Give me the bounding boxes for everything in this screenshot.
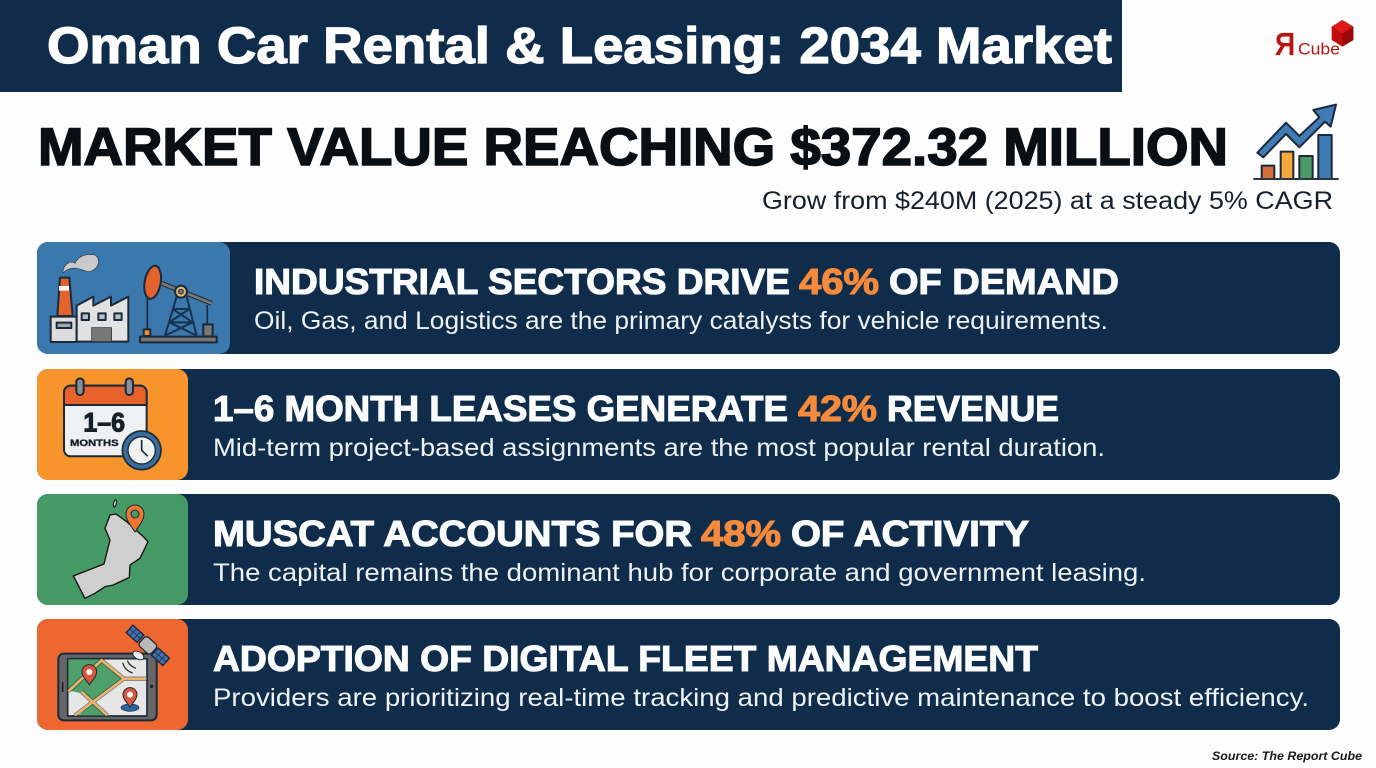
heading: INDUSTRIAL SECTORS DRIVE: [254, 261, 790, 302]
panel: digital fleet management: [37, 619, 1340, 730]
description: Mid-term project-based assignments are the most popular rental duration.: [213, 434, 1105, 462]
icon panel: blue: [37, 242, 230, 354]
heading: 42%: [798, 388, 877, 429]
icon: calendar and clock: [64, 378, 161, 470]
icon panel: red-orange: [37, 619, 188, 730]
description: The capital remains the dominant hub for corporate and government leasing.: [213, 559, 1146, 587]
logo: RCube: [1275, 20, 1353, 62]
header banner: [0, 0, 1122, 92]
icon: growth chart: [1253, 105, 1339, 179]
icon: factory and oil pump: [51, 254, 217, 342]
heading: 48%: [701, 513, 781, 554]
heading: ADOPTION OF DIGITAL FLEET MANAGEMENT: [213, 638, 1038, 679]
heading: OF DEMAND: [889, 261, 1119, 302]
description: Providers are prioritizing real-time tracking and predictive maintenance to boost efficiency.: [213, 684, 1309, 712]
icon panel: green: [37, 494, 188, 605]
heading: 46%: [799, 261, 879, 302]
description: Oil, Gas, and Logistics are the primary catalysts for vehicle requirements.: [254, 307, 1108, 335]
growth subtitle: Grow from $240M (2025) at a steady 5% CAGR: [762, 187, 1333, 215]
heading: 1–6 MONTH LEASES GENERATE: [213, 388, 788, 429]
source note: Source: The Report Cube: [1212, 749, 1362, 763]
logo: RCube: Cube: [1298, 40, 1340, 59]
heading: MUSCAT ACCOUNTS FOR: [213, 513, 692, 554]
panel: lease duration: [37, 369, 1340, 480]
logo: RCube: Я: [1275, 28, 1295, 62]
icon: calendar and clock: MONTHS: [70, 438, 119, 448]
heading: OF ACTIVITY: [791, 513, 1029, 554]
panel: industrial sectors: [37, 242, 1340, 354]
panel: Muscat: [37, 494, 1340, 605]
title: Oman Car Rental & Leasing: 2034 Market: [47, 17, 1112, 74]
market value headline: MARKET VALUE REACHING $372.32 MILLION: [38, 118, 1228, 177]
icon: calendar and clock: 1–6: [83, 408, 125, 438]
icon panel: orange: [37, 369, 188, 480]
heading: [213, 388, 1059, 429]
icon: tablet map and satellite: [58, 624, 170, 720]
heading: [254, 261, 1119, 302]
heading: REVENUE: [887, 388, 1059, 429]
icon: Oman map with pin: [73, 499, 148, 598]
heading: [213, 513, 1029, 554]
